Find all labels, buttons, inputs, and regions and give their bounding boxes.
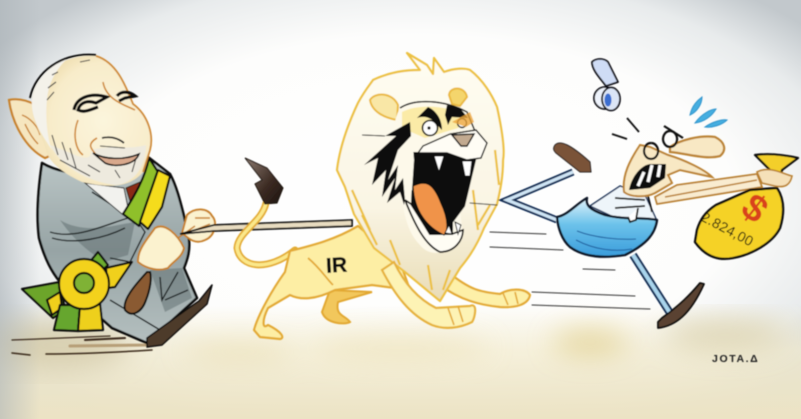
mouth [93, 153, 139, 165]
head top outline [400, 102, 477, 136]
eyes [422, 120, 438, 136]
ear right [449, 88, 467, 106]
mane shading strokes [352, 150, 499, 290]
eyeglass eyes [644, 126, 683, 159]
back leg [507, 172, 573, 220]
hand on bag [757, 170, 792, 187]
jacket fold lines [50, 192, 188, 330]
trousers [557, 198, 657, 257]
whisker stroke [362, 135, 385, 136]
speed lines [470, 203, 650, 309]
chin [405, 200, 463, 252]
rosette with ribbons [22, 259, 109, 331]
snout [418, 130, 487, 160]
orange brow accent [452, 112, 474, 127]
IR label: IR [325, 254, 348, 278]
lion body [254, 226, 410, 339]
brown strap on leg [125, 272, 151, 314]
tail tuft [245, 158, 283, 204]
head [624, 145, 712, 196]
front shoe [658, 283, 704, 328]
ground lines under president [12, 336, 152, 355]
presidential sash [88, 158, 170, 288]
white hair over spikes [388, 135, 414, 200]
hair side white [32, 58, 68, 150]
arm [655, 174, 762, 204]
front leg [633, 255, 670, 313]
hands gripping tail [138, 209, 215, 270]
head [32, 56, 151, 186]
lion tail held as rope [180, 158, 352, 265]
back shoe [554, 143, 591, 172]
arm inner line [665, 180, 757, 197]
paw toes [448, 292, 518, 325]
front leg right [440, 272, 530, 307]
front leg left [382, 262, 475, 328]
hair line [30, 55, 96, 98]
inner ear [22, 115, 40, 144]
hind leg far [322, 290, 372, 323]
mouth with teeth [629, 164, 666, 190]
tongue [413, 183, 447, 235]
president figure [9, 55, 215, 347]
face [392, 102, 486, 253]
beard strokes [52, 135, 137, 178]
lion [254, 53, 530, 339]
bag [695, 188, 783, 259]
ear [9, 99, 54, 158]
hair strokes [47, 60, 90, 100]
mane [337, 53, 504, 301]
alarm marks [612, 118, 639, 139]
mouth black [412, 153, 475, 234]
ear left [370, 95, 398, 120]
shirt [590, 186, 657, 221]
eyes and brows [74, 92, 135, 111]
fingers and suspenders [615, 196, 652, 222]
trouser lines [576, 231, 636, 250]
sweat drops [690, 97, 727, 127]
eye right [458, 118, 466, 128]
fangs [434, 156, 472, 176]
bag neck [755, 154, 798, 180]
running man [507, 126, 798, 328]
jacket [38, 157, 197, 343]
jacket shading [60, 220, 192, 312]
flying glasses [592, 59, 620, 110]
face outline right [96, 56, 151, 172]
big nose [670, 137, 724, 157]
dollar sign: $ [733, 186, 776, 232]
brows [417, 105, 468, 130]
nose and cheek lines [75, 82, 135, 155]
shoe [147, 285, 212, 347]
nose [452, 134, 474, 146]
face yellow shading [402, 107, 465, 138]
shirt and tie [85, 183, 128, 214]
bag amount: 2.824,00 [699, 209, 756, 249]
white beard [50, 145, 146, 185]
black mane spikes [364, 122, 412, 205]
signature: JOTA.Δ [712, 353, 759, 365]
